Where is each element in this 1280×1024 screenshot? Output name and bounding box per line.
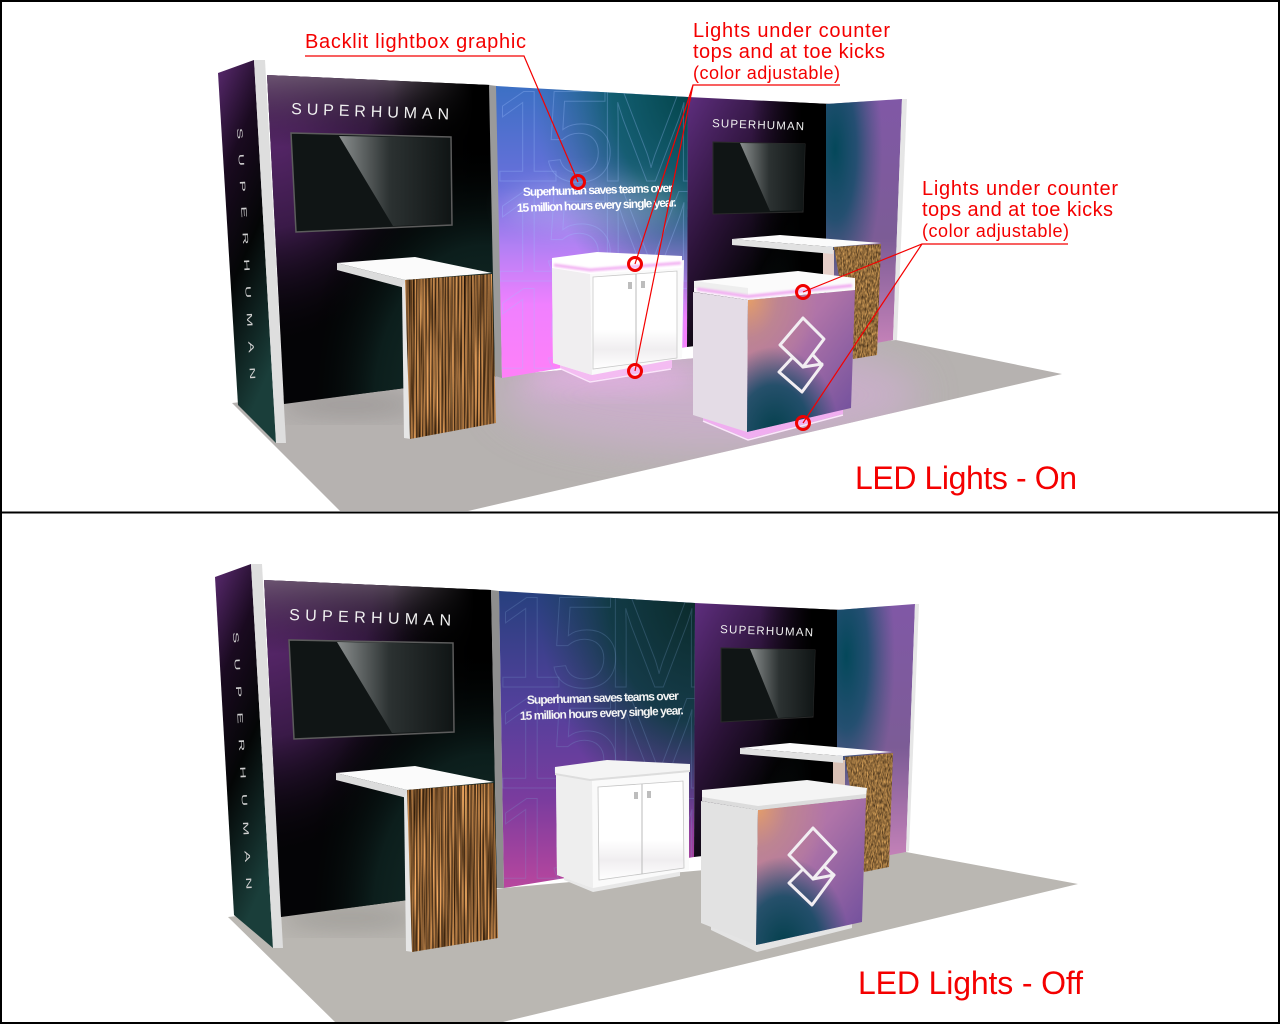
ghost numerals: 15M (490, 260, 705, 406)
left table (336, 766, 498, 952)
left end wall (215, 564, 273, 948)
right back wall (687, 97, 830, 347)
wall edge grey (489, 85, 502, 378)
panel: LED lights on (218, 60, 1062, 511)
white wall edge (251, 564, 283, 948)
callout: rear counter lights: tops and at toe kicks (693, 41, 885, 63)
side wall (837, 604, 919, 865)
side wall (826, 99, 907, 352)
right monitor (713, 142, 805, 214)
left monitor (291, 133, 452, 232)
wall brand text: SUPERHUMAN (712, 118, 804, 133)
backlit lightbox graphic (496, 86, 688, 378)
lightbox message: Superhuman saves teams over (523, 181, 673, 199)
back table (740, 743, 893, 872)
callout: rear counter lights (628, 20, 890, 378)
lightbox message: 15 million hours every single year. (520, 703, 684, 723)
wall brand text: SUPERHUMAN (291, 101, 449, 124)
wall edge grey (491, 590, 504, 888)
back table (732, 235, 881, 359)
front counter (693, 271, 855, 440)
callout: front counter lights: Lights under counter (922, 178, 1118, 200)
wall brand text: SUPERHUMAN (720, 624, 813, 639)
ghost numerals: 15M (493, 670, 713, 816)
floor carpet (228, 852, 1078, 1022)
panel: LED lights off (215, 564, 1078, 1022)
white wall edge (254, 60, 286, 443)
floor shadow (280, 908, 420, 928)
wall brand text: SUPERHUMAN (289, 607, 451, 630)
ghost numerals: 15M (490, 63, 705, 209)
lightbox graphic unlit (499, 591, 695, 888)
left table (337, 257, 496, 439)
vertical brand text: SUPERHUMAN (235, 128, 257, 380)
callout: rear counter lights: (color adjustable) (693, 63, 840, 83)
left back wall (264, 580, 497, 917)
rear storage counter (555, 760, 690, 892)
callout: front counter lights (796, 178, 1118, 430)
ghost numerals (500, 91, 688, 378)
callout: front counter lights: (color adjustable) (922, 221, 1069, 241)
caption: lights on: LED Lights - On (855, 460, 1077, 496)
callout: rear counter lights: Lights under counter (693, 20, 890, 42)
pink floor glow and shadow (280, 340, 920, 450)
ghost numerals: 15M (493, 569, 713, 715)
icon: brand logo (789, 828, 836, 905)
ghost numerals (502, 597, 694, 888)
callout: backlit lightbox: Backlit lightbox graphic (305, 31, 526, 53)
left back wall (267, 75, 496, 404)
floor carpet (232, 340, 1062, 511)
caption: lights off: LED Lights - Off (858, 965, 1083, 1001)
ghost numerals: 15M (493, 770, 713, 916)
icon: brand logo (779, 318, 824, 392)
callout: front counter lights: tops and at toe kicks (922, 199, 1113, 221)
right monitor (721, 648, 815, 722)
rear storage counter (552, 252, 684, 382)
vertical brand text: SUPERHUMAN (231, 632, 253, 890)
right back wall (694, 603, 841, 857)
lightbox message: 15 million hours every single year. (517, 195, 677, 215)
ghost numerals: 15M (490, 163, 705, 309)
front counter (701, 780, 867, 952)
lightbox message (517, 181, 677, 215)
lightbox message: Superhuman saves teams over (527, 689, 679, 707)
lightbox message (520, 689, 684, 723)
callout: backlit lightbox (305, 31, 584, 188)
left end wall (218, 60, 276, 443)
left monitor (289, 640, 454, 739)
